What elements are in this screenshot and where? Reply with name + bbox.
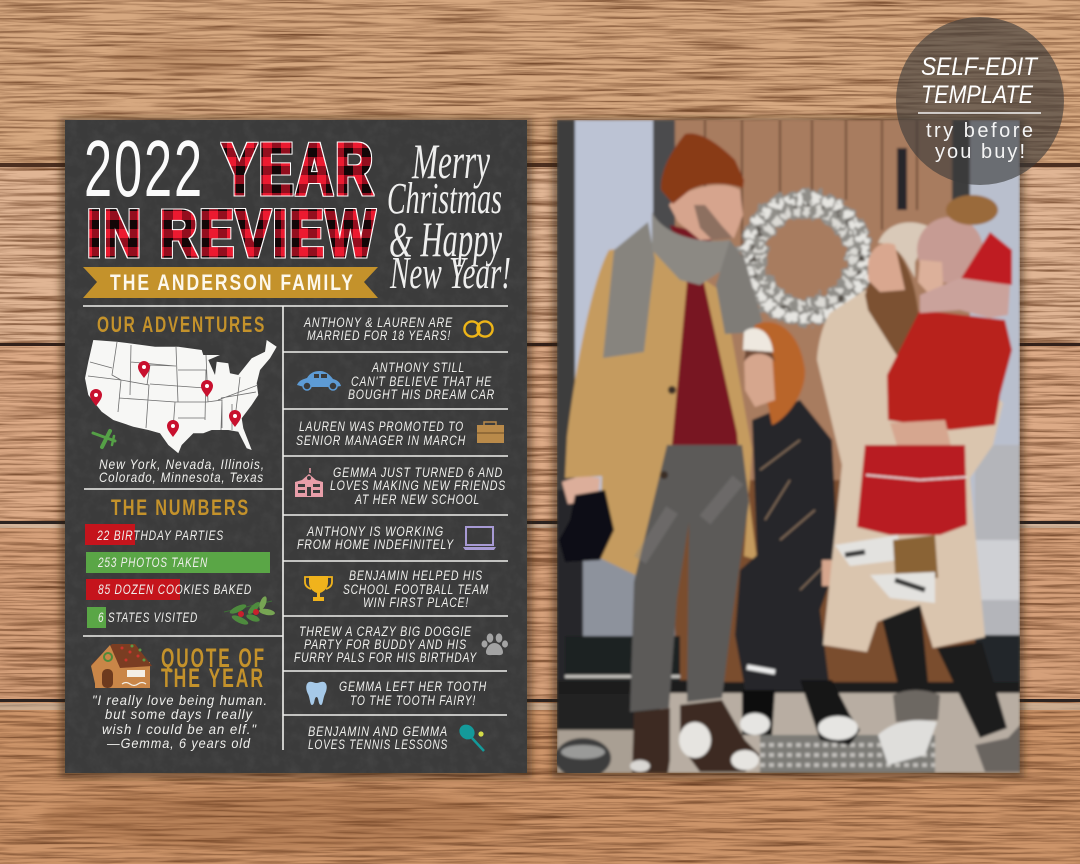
fact: new school xyxy=(295,465,506,507)
fact: tooth fairy xyxy=(306,679,487,708)
icon: tennis racket xyxy=(456,721,484,751)
bar: cookies baked: 85 DOZEN COOKIES BAKED xyxy=(98,582,252,597)
fact: new school: GEMMA JUST TURNED 6 AND xyxy=(333,465,503,480)
fact: dream car xyxy=(297,360,495,402)
holiday greeting xyxy=(387,133,511,298)
title: IN REVIEW: IN REVIEW xyxy=(87,196,377,270)
photo: family at front door xyxy=(555,120,1020,778)
family name banner: THE ANDERSON FAMILY xyxy=(110,270,355,295)
bar: photos taken: 253 PHOTOS TAKEN xyxy=(97,555,208,570)
holiday greeting: & Happy xyxy=(389,211,502,267)
heading: quote of the year: THE YEAR xyxy=(161,663,265,693)
boy xyxy=(735,322,860,745)
man xyxy=(559,133,762,773)
quote text xyxy=(92,692,268,751)
card shadows xyxy=(60,118,1024,778)
fact: promoted: SENIOR MANAGER IN MARCH xyxy=(296,433,466,448)
fact: working from home: FROM HOME INDEFINITELY xyxy=(297,537,454,552)
badge heading: SELF-EDIT xyxy=(921,53,1039,81)
fact: working from home xyxy=(297,524,496,552)
icon: briefcase xyxy=(477,422,504,443)
badge heading xyxy=(921,53,1039,109)
fact: football team: SCHOOL FOOTBALL TEAM xyxy=(343,582,489,597)
quote text: wish I could be an elf." xyxy=(102,721,257,737)
quote text: —Gemma, 6 years old xyxy=(106,735,251,751)
fact: football team: BENJAMIN HELPED HIS xyxy=(349,568,483,583)
fact: dream car: BOUGHT HIS DREAM CAR xyxy=(348,387,495,402)
fact: tennis lessons: LOVES TENNIS LESSONS xyxy=(308,737,448,752)
fact: promoted xyxy=(296,419,504,448)
title: 2022: 2022 xyxy=(84,124,204,213)
fact: new school: AT HER NEW SCHOOL xyxy=(354,492,480,507)
bar: cookies baked xyxy=(86,579,252,600)
badge heading: TEMPLATE xyxy=(921,81,1033,109)
heading: our adventures: OUR ADVENTURES xyxy=(97,312,266,337)
holiday greeting: Merry xyxy=(411,133,491,189)
fact: tooth fairy: GEMMA LEFT HER TOOTH xyxy=(339,679,487,694)
fact: tennis lessons: BENJAMIN AND GEMMA xyxy=(308,724,448,739)
US map with pins xyxy=(85,340,277,453)
visited states list: New York, Nevada, Illinois, xyxy=(99,456,265,472)
heading: the numbers: THE NUMBERS xyxy=(111,495,250,520)
badge subtext xyxy=(926,120,1033,163)
heading: quote of the year: QUOTE OF xyxy=(161,643,266,673)
bar: states visited: 6 STATES VISITED xyxy=(98,610,198,625)
bar: birthday parties: 22 BIRTHDAY PARTIES xyxy=(96,528,224,543)
icon: tooth xyxy=(306,682,327,705)
badge subtext: you buy! xyxy=(935,141,1025,163)
family name banner xyxy=(83,267,378,298)
fact: married: MARRIED FOR 18 YEARS! xyxy=(307,328,451,343)
fact: working from home: ANTHONY IS WORKING xyxy=(306,524,444,539)
icon: trophy xyxy=(305,576,332,601)
panel: quote of the year xyxy=(91,643,268,751)
bar: birthday parties xyxy=(85,524,224,545)
icon: airplane xyxy=(93,431,115,447)
column dividers xyxy=(83,306,508,750)
door and window background xyxy=(555,120,1020,778)
wreath xyxy=(746,198,866,318)
visited states list: Colorado, Minnesota, Texas xyxy=(99,469,264,485)
bar: photos taken xyxy=(86,552,270,573)
panel: our adventures xyxy=(85,312,277,485)
icon: paw print xyxy=(482,633,508,655)
badge subtext: try before xyxy=(926,120,1033,142)
fact: football team xyxy=(305,568,489,610)
fact: doggie party: THREW A CRAZY BIG DOGGIE xyxy=(299,624,472,639)
holiday greeting: New Year! xyxy=(389,247,511,298)
fact: promoted: LAUREN WAS PROMOTED TO xyxy=(299,419,464,434)
fact: dream car: CAN'T BELIEVE THAT HE xyxy=(351,374,492,389)
icon: school building xyxy=(295,468,323,497)
icon: wedding rings xyxy=(464,321,493,337)
icon: laptop xyxy=(463,527,496,550)
fact: doggie party: FURRY PALS FOR HIS BIRTHDAY xyxy=(294,650,477,665)
heading: quote of the year xyxy=(161,643,266,693)
quote text: "I really love being human. xyxy=(92,692,268,708)
fact: new school: LOVES MAKING NEW FRIENDS xyxy=(330,478,506,493)
title: YEAR: YEAR xyxy=(222,130,375,210)
fact: married xyxy=(303,315,493,343)
child xyxy=(835,195,1012,603)
bar: states visited xyxy=(87,607,198,628)
panel: the numbers xyxy=(85,495,275,628)
fact: football team: WIN FIRST PLACE! xyxy=(363,595,469,610)
badge: self-edit template xyxy=(896,17,1064,185)
fact: married: ANTHONY & LAUREN ARE xyxy=(303,315,453,330)
fact: tennis lessons xyxy=(308,721,484,752)
icon: gingerbread house xyxy=(91,644,152,688)
panel: year in review chalkboard card xyxy=(65,120,527,773)
icon: holly sprig xyxy=(224,595,275,627)
fact: dream car: ANTHONY STILL xyxy=(371,360,465,375)
visited states list xyxy=(99,456,265,485)
fact: doggie party: PARTY FOR BUDDY AND HIS xyxy=(304,637,467,652)
icon: blue car xyxy=(297,371,341,390)
quote text: but some days I really xyxy=(105,706,253,722)
fact: tooth fairy: TO THE TOOTH FAIRY! xyxy=(350,693,476,708)
fact: doggie party xyxy=(294,624,508,665)
woman xyxy=(817,222,1020,772)
holiday greeting: Christmas xyxy=(387,174,502,223)
